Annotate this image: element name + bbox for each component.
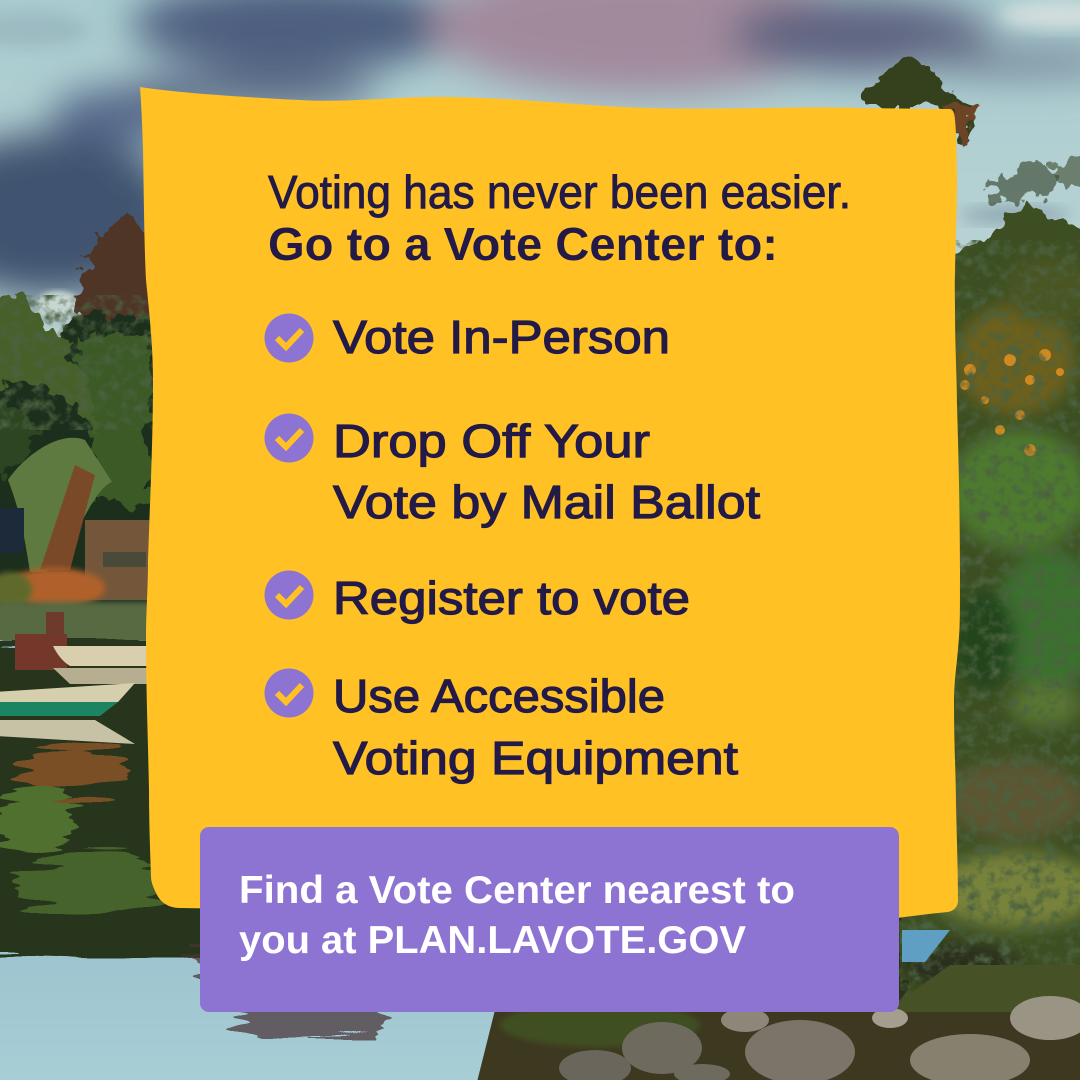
item: drop off ballot [264, 414, 760, 528]
heading: Voting has never been easier. [268, 166, 851, 218]
shore rocks and planting [475, 930, 1080, 1080]
callout: find a vote center: Find a Vote Center nearest to [239, 869, 795, 912]
canal water with reflection [0, 640, 560, 1080]
sky [0, 0, 1080, 340]
foliage speckle texture [0, 240, 1080, 1000]
item: vote in-person: Vote In-Person [333, 311, 670, 363]
yellow panel [140, 87, 960, 920]
item: accessible voting equipment: Voting Equipment [333, 732, 738, 784]
callout: find a vote center: you at PLAN.LAVOTE.GOV [239, 919, 746, 962]
item: accessible voting equipment: Use Accessible [333, 670, 665, 722]
palm tree top right [862, 58, 972, 145]
item: drop off ballot: Drop Off Your [333, 415, 650, 467]
heading: Go to a Vote Center to: [268, 218, 778, 270]
callout: find a vote center [200, 827, 899, 1012]
boats [0, 612, 150, 744]
left trees and palms [0, 215, 170, 660]
item: register to vote: Register to vote [333, 572, 690, 624]
heading [268, 166, 851, 270]
right foliage [900, 140, 1080, 1010]
item: drop off ballot: Vote by Mail Ballot [333, 476, 760, 528]
item: accessible voting equipment [264, 668, 738, 784]
